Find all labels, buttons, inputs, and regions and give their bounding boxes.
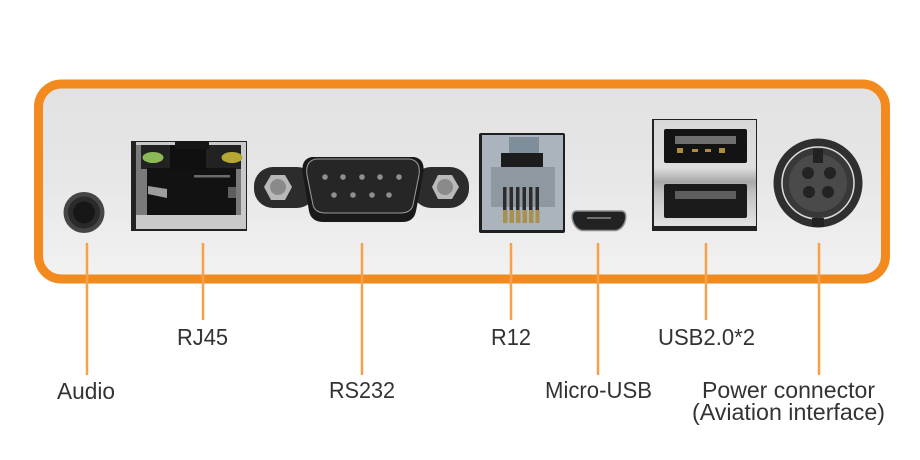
leader line: Power connector	[818, 243, 820, 375]
icon: dual USB port	[652, 119, 757, 231]
label: RS232: RS232	[329, 377, 395, 403]
leader line: USB2.0	[705, 243, 707, 320]
leader line: R12	[510, 243, 512, 320]
label: Audio: Audio	[57, 378, 115, 404]
label: Aviation interface: (Aviation interface)	[692, 399, 885, 425]
leader line: Audio	[86, 243, 88, 375]
label: Micro-USB: Micro-USB	[545, 377, 652, 403]
icon: RJ45 port	[131, 141, 247, 231]
panel: device rear with orange frame	[38, 84, 886, 279]
label: RJ45: RJ45	[177, 324, 228, 350]
leader line: RS232	[361, 243, 363, 375]
leader line: Micro-USB	[597, 243, 599, 375]
leader line: RJ45	[202, 243, 204, 320]
icon: R12 port	[479, 133, 565, 233]
label: USB2.0*2: USB2.0*2	[658, 324, 755, 350]
label: Power connector: Power connector	[702, 377, 875, 403]
icon: Micro-USB port	[572, 211, 626, 230]
icon: power connector	[774, 138, 862, 228]
icon: audio jack	[64, 192, 104, 233]
icon: RS232 DB9 connector	[254, 157, 469, 222]
label: R12: R12	[491, 324, 531, 350]
